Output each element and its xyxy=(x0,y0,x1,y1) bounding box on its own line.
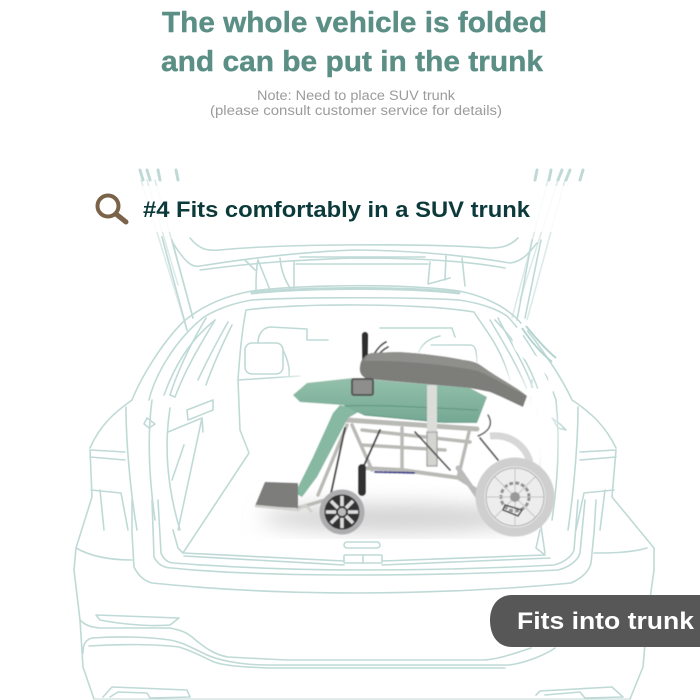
footrest xyxy=(255,482,312,512)
rear bumper and body xyxy=(74,500,654,699)
rear wheel xyxy=(480,462,550,532)
wheelchair photo xyxy=(255,335,555,532)
note text: Note: Need to place SUV trunk xyxy=(257,88,455,103)
heading: #4 Fits comfortably in a SUV trunk xyxy=(143,197,531,222)
magnifier icon xyxy=(98,196,126,222)
interior side panels xyxy=(168,400,540,530)
car line drawing xyxy=(74,170,654,699)
trunk floor and sill xyxy=(152,500,585,575)
armrest bracket xyxy=(352,379,373,395)
trunk opening frame xyxy=(90,286,616,530)
front castor wheel xyxy=(322,492,362,532)
title xyxy=(161,7,547,78)
folded frame xyxy=(298,415,498,508)
title: and can be put in the trunk xyxy=(161,46,544,78)
note text xyxy=(210,88,502,118)
right tail light xyxy=(576,450,654,548)
raised tailgate xyxy=(140,170,583,330)
green seat cushions xyxy=(293,378,487,423)
title: The whole vehicle is folded xyxy=(162,7,547,39)
floor shadow xyxy=(260,504,530,532)
label pill: fits into trunk xyxy=(490,595,700,647)
white band behind heading xyxy=(135,186,565,232)
left tail light xyxy=(76,450,128,548)
folded grey backrest xyxy=(360,352,527,407)
green leg cushion xyxy=(295,405,362,497)
white swirl watermark xyxy=(517,322,568,393)
rear seats and headrests xyxy=(183,305,545,553)
far rear wheel xyxy=(490,436,530,462)
note text: (please consult customer service for details) xyxy=(210,103,502,118)
white glow behind wheelchair xyxy=(255,350,555,520)
backrest handle xyxy=(365,335,388,362)
label pill: fits into trunk: Fits into trunk xyxy=(517,608,695,635)
support post xyxy=(427,385,437,431)
